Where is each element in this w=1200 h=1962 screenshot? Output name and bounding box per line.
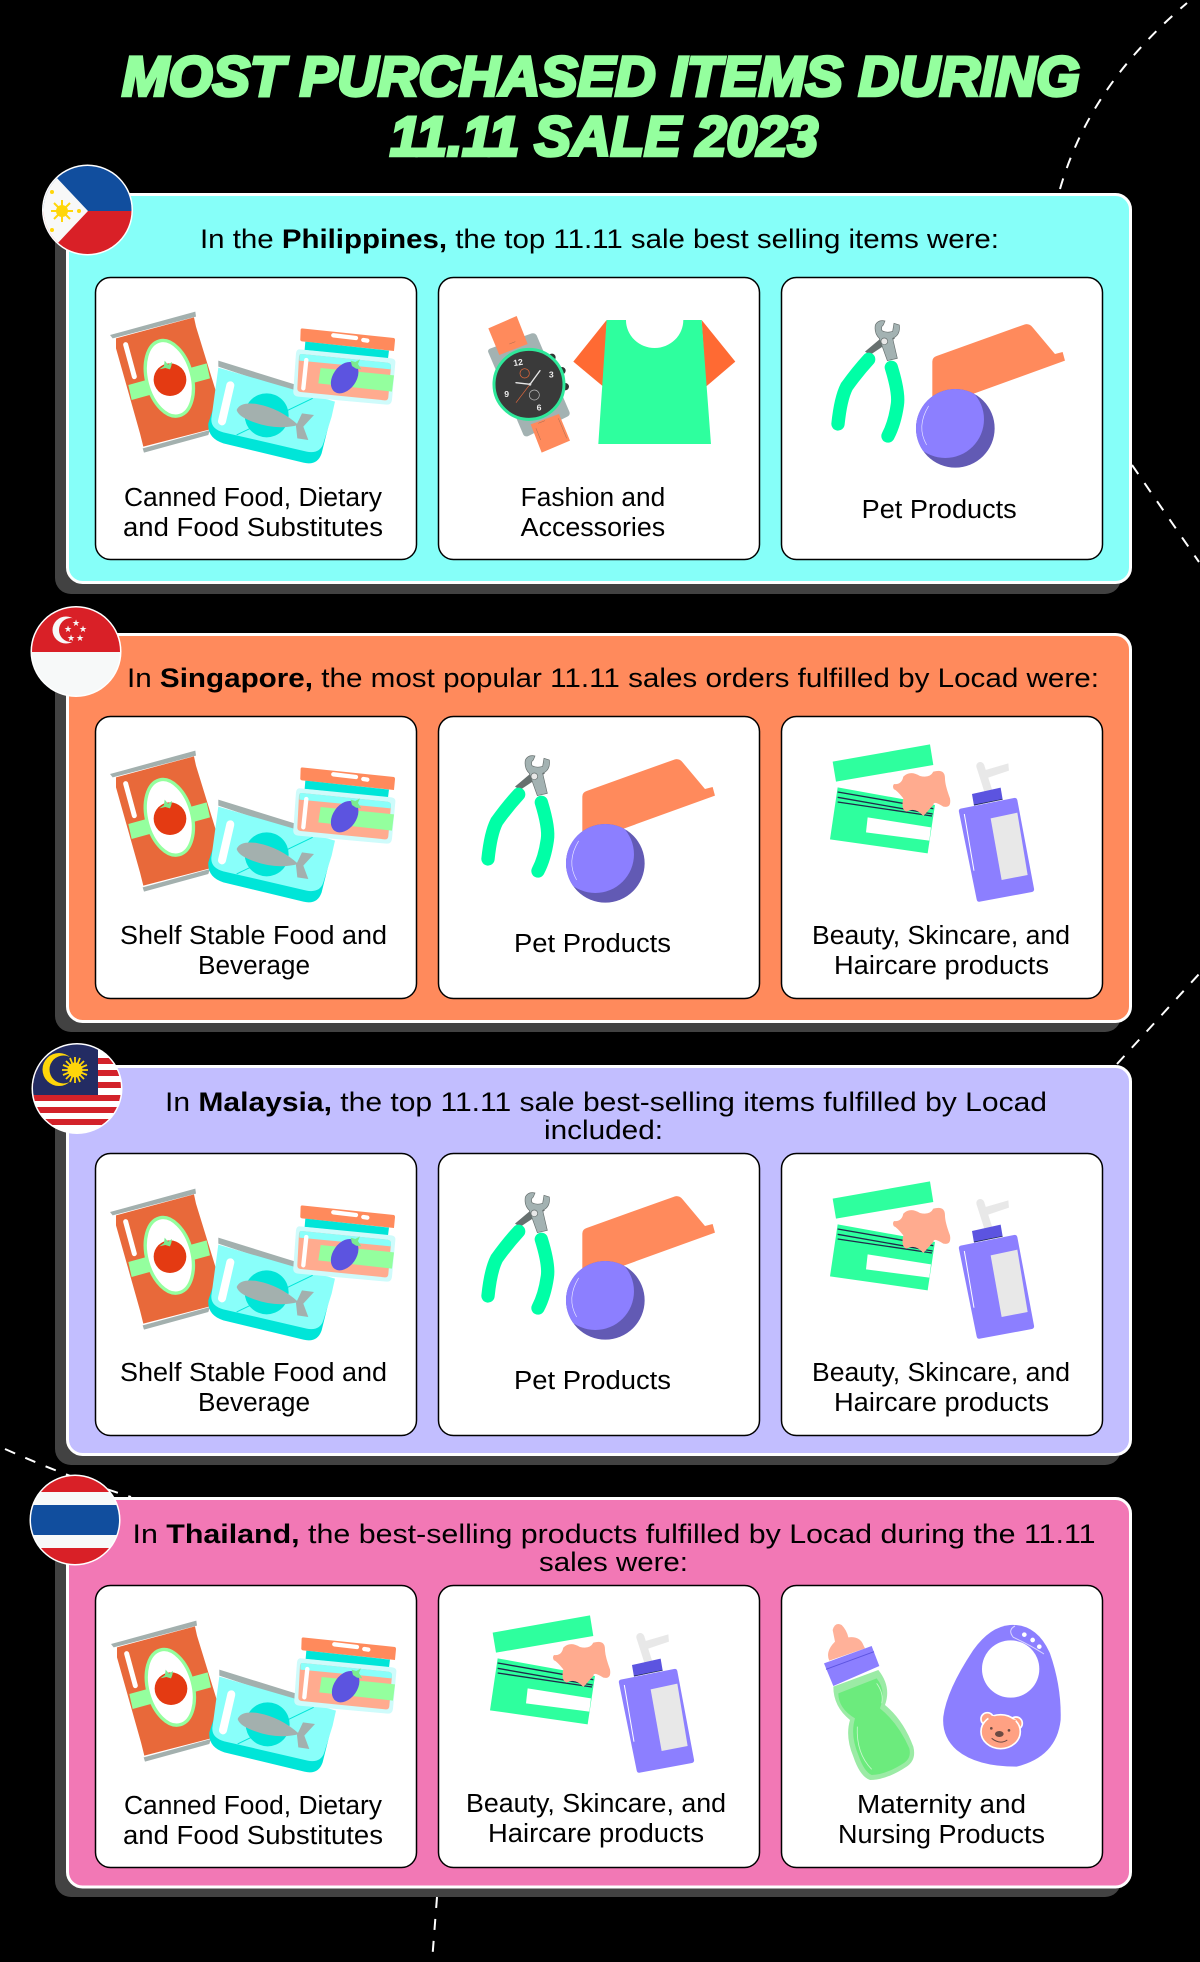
title [122, 44, 1080, 168]
dashed connector: bottom [432, 1897, 437, 1962]
card: canned food: Canned Food, Dietary [124, 1792, 382, 1820]
heading: Malaysia: included: [544, 1115, 663, 1145]
card: canned food [96, 1586, 416, 1868]
dashed connector: top right [1060, 3, 1187, 189]
icon: Thailand flag [29, 1474, 121, 1566]
card: beauty products [438, 1586, 760, 1868]
card: pet products: Pet Products [514, 930, 671, 958]
heading: Malaysia: In Malaysia, the top 11.11 sale best-selling items fulfilled by Locad [165, 1087, 1047, 1117]
card: pet products: Pet Products [862, 496, 1017, 524]
panel: Singapore [55, 634, 1130, 1032]
card: shelf stable food: Shelf Stable Food and [120, 922, 387, 950]
icon: Singapore flag [30, 606, 122, 698]
card: beauty products [782, 716, 1102, 998]
card: maternity and nursing [782, 1586, 1102, 1868]
heading: Malaysia [165, 1087, 1047, 1145]
card: pet products [438, 716, 760, 998]
panel: Thailand [55, 1498, 1130, 1897]
card: beauty products [782, 1154, 1102, 1436]
card: beauty products: Beauty, Skincare, and [812, 922, 1070, 950]
card: pet products: Pet Products [514, 1367, 671, 1395]
card: canned food [96, 278, 416, 560]
icon: Singapore flag: ★ [64, 625, 72, 635]
card: shelf stable food [96, 716, 416, 998]
card: canned food: and Food Substitutes [123, 514, 383, 542]
card: pet products [438, 1154, 760, 1436]
card: beauty products: Haircare products [834, 1389, 1049, 1417]
title: MOST PURCHASED ITEMS DURING [122, 44, 1080, 108]
heading: Philippines: In the Philippines, the top 11.11 sale best selling items were: [200, 224, 999, 254]
card: shelf stable food: Shelf Stable Food and [120, 1359, 387, 1387]
card: beauty products: Haircare products [488, 1820, 704, 1848]
card: shelf stable food: Beverage [198, 1389, 310, 1417]
card: beauty products: Beauty, Skincare, and [466, 1790, 726, 1818]
card: canned food: and Food Substitutes [123, 1822, 383, 1850]
card: shelf stable food [96, 1154, 416, 1436]
icon: Singapore flag: ★ [67, 634, 75, 644]
icon: Singapore flag: ★ [76, 634, 84, 644]
icon: Singapore flag: ★ [79, 625, 87, 635]
card: beauty products: Haircare products [834, 952, 1049, 980]
title: 11.11 SALE 2023 [390, 104, 818, 168]
card: beauty products: Beauty, Skincare, and [812, 1359, 1070, 1387]
card: fashion and accessories: Accessories [521, 514, 665, 542]
heading: Singapore: In Singapore, the most popular 11.11 sales orders fulfilled by Locad were: [127, 663, 1099, 693]
heading: Thailand: sales were: [539, 1547, 688, 1577]
heading: Thailand [132, 1519, 1096, 1577]
icon: Malaysia flag [30, 1043, 124, 1135]
icon: Philippines flag [42, 164, 133, 256]
card: shelf stable food: Beverage [198, 952, 310, 980]
dashed connector: left of Thailand panel [5, 1449, 131, 1497]
panel: Philippines [55, 194, 1130, 594]
card: maternity and nursing: Maternity and [857, 1791, 1026, 1819]
panel: Malaysia [55, 1066, 1130, 1465]
heading: Thailand: In Thailand, the best-selling products fulfilled by Locad during the 11.11 [132, 1519, 1096, 1549]
icon: Singapore flag: ★ [72, 619, 80, 629]
card: fashion and accessories [438, 278, 760, 560]
card: maternity and nursing: Nursing Products [838, 1821, 1045, 1849]
dashed connector: right of Malaysia panel [1117, 973, 1200, 1064]
card: fashion and accessories: Fashion and [521, 484, 665, 512]
dashed connector: right of Philippines panel [1132, 465, 1199, 562]
card: canned food: Canned Food, Dietary [124, 484, 382, 512]
card: pet products [782, 278, 1102, 560]
